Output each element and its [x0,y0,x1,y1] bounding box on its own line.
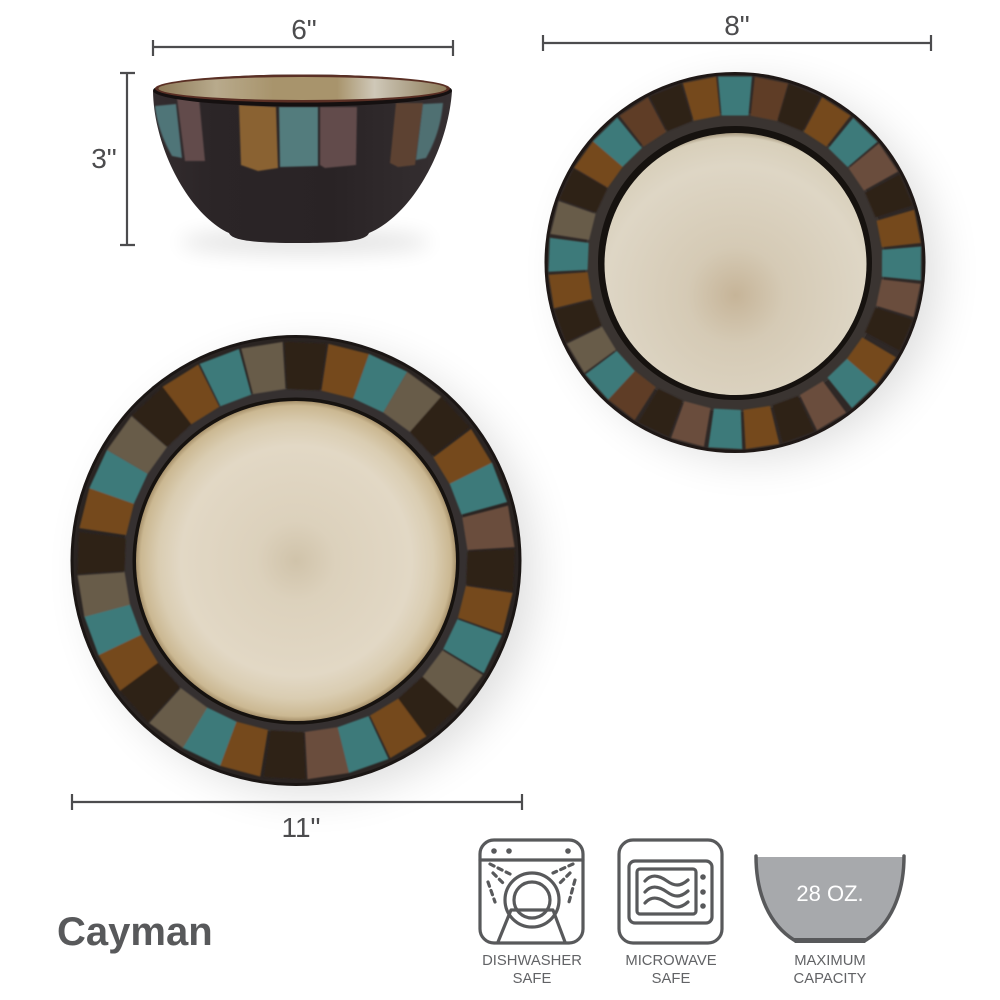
small plate tiles [548,76,921,449]
small plate 8 inch [544,72,938,458]
label: dishwasher safe: DISHWASHER [482,953,582,969]
large plate rim [70,335,522,786]
dimension: bowl width 6 inches: 6" [291,14,317,45]
small plate rim [544,72,926,453]
large plate 11 inch [70,335,534,794]
label: maximum capacity [794,953,867,987]
large plate shadow [90,350,534,794]
dimension: small plate 8 inches [543,10,931,51]
dimension: bowl height 3 inches [91,73,135,245]
large plate tiles [77,342,515,779]
label: microwave safe [625,953,717,987]
small plate shadow [566,86,938,458]
label: dishwasher safe [482,953,582,987]
large plate groove and well [132,398,460,724]
dimension: bowl width 6 inches [153,14,453,56]
label: microwave safe: SAFE [652,971,690,987]
label: microwave safe: MICROWAVE [625,953,717,969]
dimension: large plate 11 inches: 11" [281,812,321,843]
dimension: small plate 8 inches: 8" [724,10,750,41]
small plate groove and well [598,126,872,400]
label: maximum capacity: CAPACITY [794,971,867,987]
bowl rim and interior [153,74,452,106]
brand name: Cayman [57,910,213,954]
label: maximum capacity: MAXIMUM [794,953,866,969]
icon: dishwasher safe [480,840,583,943]
bowl [153,74,452,255]
icon: maximum capacity bowl [756,856,904,943]
dimension: large plate 11 inches [72,794,522,843]
bowl body [153,91,452,243]
bowl shadow [180,229,430,255]
icon: maximum capacity bowl: 28 OZ. [796,881,864,906]
dimension: bowl height 3 inches: 3" [91,143,117,174]
bowl decorative tiles [155,98,443,171]
icon: microwave safe [619,840,722,943]
label: dishwasher safe: SAFE [513,971,551,987]
